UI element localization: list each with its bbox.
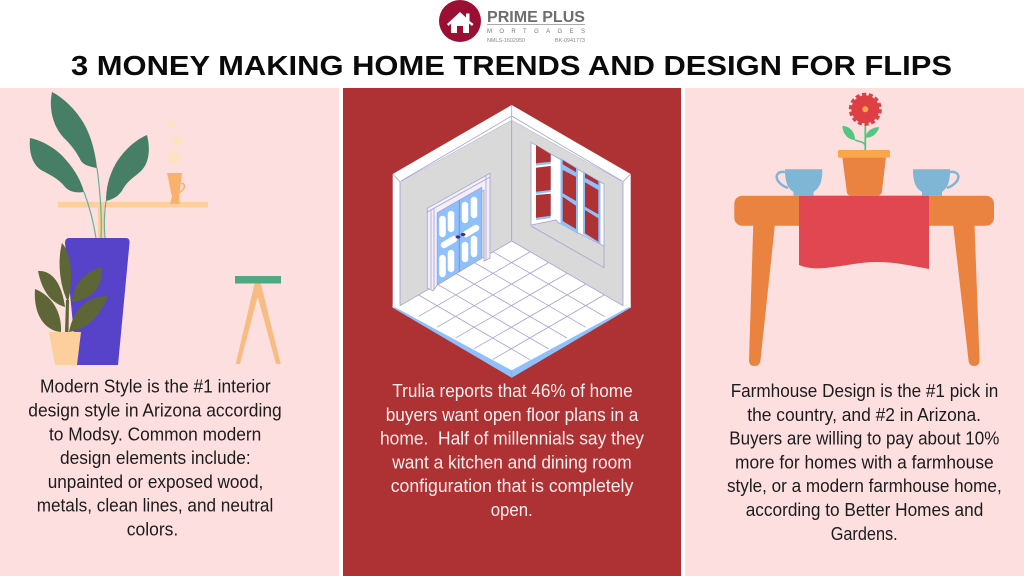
text: farmhouse design: according to Better Homes and — [746, 500, 983, 520]
panel: farmhouse design — [685, 88, 1024, 576]
red table runner — [799, 196, 929, 269]
text: modern style: metals, clean lines, and neutral — [37, 496, 273, 516]
panel: modern style — [0, 88, 339, 576]
logo: Prime Plus Mortgages — [439, 0, 585, 44]
text: farmhouse design: Gardens. — [831, 524, 898, 544]
title: 3 MONEY MAKING HOME TRENDS AND DESIGN FOR FLIPS — [71, 50, 952, 81]
text: modern style: design elements include: — [60, 448, 251, 468]
icon: steaming mug — [167, 120, 184, 204]
bay window — [531, 142, 604, 268]
text: modern style: to Modsy. Common modern — [49, 424, 261, 444]
icon: left cup — [777, 169, 822, 196]
text: open floor plans: configuration that is completely — [391, 476, 633, 496]
illustration: shelf with plant, mug and stool — [30, 92, 281, 365]
text: modern style: Modern Style is the #1 interior — [40, 377, 271, 397]
floor tiles — [393, 241, 631, 378]
text: farmhouse design: the country, and #2 in Arizona. — [747, 405, 981, 425]
text: modern style — [28, 377, 282, 540]
floor base — [393, 303, 631, 378]
logo: Prime Plus Mortgages: NMLS-1602950 — [487, 38, 525, 44]
text: farmhouse design: style, or a modern farmhouse home, — [727, 476, 1002, 496]
text: farmhouse design: Farmhouse Design is the #1 pick in — [731, 381, 998, 401]
text: farmhouse design — [727, 381, 1002, 544]
text: open floor plans: want a kitchen and dining room — [391, 452, 632, 472]
text: open floor plans — [380, 381, 644, 520]
double door — [427, 173, 490, 291]
text: farmhouse design: Buyers are willing to pay about 10% — [729, 429, 999, 449]
panel: open floor plans — [343, 88, 681, 576]
illustration: isometric room — [393, 105, 631, 378]
icon: house badge — [439, 0, 481, 42]
logo: Prime Plus Mortgages: BK-0941773 — [555, 38, 585, 44]
text: open floor plans: Trulia reports that 46% of home — [392, 381, 633, 401]
text: open floor plans: buyers want open floor plans in a — [386, 405, 639, 425]
text: open floor plans: open. — [491, 500, 533, 520]
text: farmhouse design: more for homes with a farmhouse — [735, 452, 994, 472]
text: open floor plans: home. Half of millennials say they — [380, 429, 644, 449]
text: modern style: design style in Arizona according — [28, 400, 282, 420]
icon: right cup — [913, 169, 958, 196]
shelf — [58, 202, 208, 239]
illustration: farmhouse table — [734, 95, 994, 366]
small potted plant — [35, 243, 108, 365]
table — [734, 196, 994, 366]
stool — [235, 276, 281, 364]
purple vase — [65, 238, 130, 365]
logo: Prime Plus Mortgages: MORTGAGES — [487, 29, 585, 35]
text: modern style: colors. — [127, 520, 178, 540]
icon: potted flower — [838, 95, 890, 196]
tall plant leaves — [30, 92, 149, 238]
text: modern style: unpainted or exposed wood, — [48, 472, 263, 492]
walls — [393, 105, 631, 308]
logo wordmark: PRIME PLUS — [487, 9, 585, 26]
